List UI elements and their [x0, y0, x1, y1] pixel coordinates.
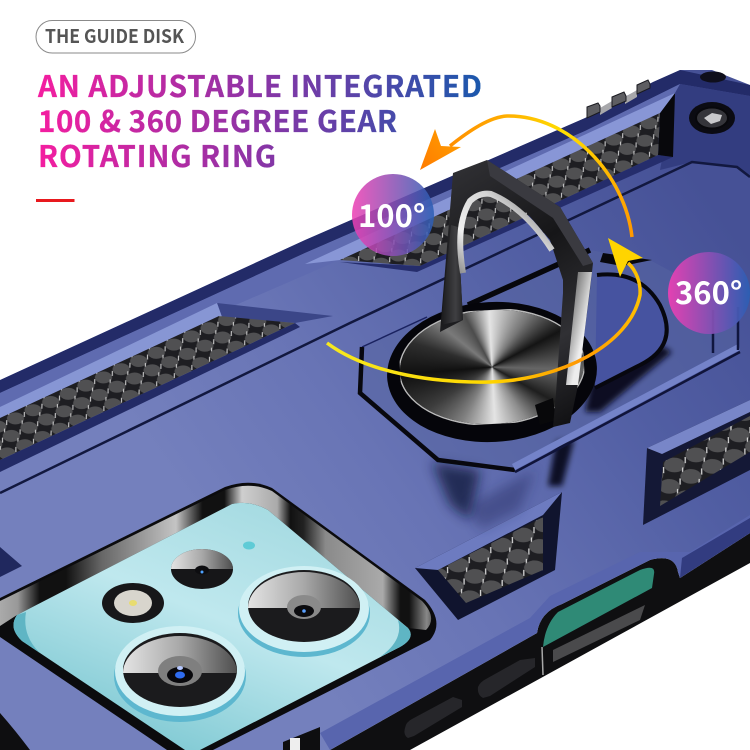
left texture: [0, 316, 295, 460]
bottom port piece: [283, 727, 320, 750]
top right panel: [660, 84, 750, 177]
key two: [612, 92, 626, 107]
disc base: [383, 297, 601, 447]
diagonal groove: [0, 162, 750, 493]
key three: [637, 80, 650, 94]
grip strip: left: [0, 303, 333, 472]
left bevel: [0, 303, 222, 418]
ring lower right silver: [566, 272, 592, 385]
arrow head right: [608, 238, 643, 277]
top hole: [700, 72, 726, 82]
small lens: [171, 549, 233, 589]
plate lower lip: [512, 344, 740, 470]
bottom port highlight: [290, 738, 300, 750]
camera glass: [13, 503, 411, 750]
side button upper: [478, 658, 535, 698]
oval shadow: [585, 345, 672, 412]
main lens right: [238, 566, 370, 657]
plate thin top line: [362, 317, 427, 347]
ring disc: [397, 305, 587, 429]
top edge band: [0, 70, 750, 393]
screw socket: [704, 113, 722, 124]
camera island: [0, 483, 436, 750]
plate wedge bar: [600, 253, 652, 266]
main lens bottom: [114, 626, 246, 722]
key connectors: [600, 90, 637, 115]
teal dot: [243, 542, 255, 550]
badge 360 degrees: 360°: [675, 268, 742, 313]
left lower bevel: [0, 323, 300, 472]
badge 100 degrees: 100°: [358, 191, 425, 236]
ring inner silver edge: [460, 194, 552, 273]
title: 100 & 360 DEGREE GEAR: [38, 99, 397, 141]
gear ring arch: [440, 160, 593, 427]
plate top black bar: [468, 250, 590, 305]
plate ticks: [712, 320, 740, 353]
frame black base: [0, 483, 436, 750]
title: ROTATING RING: [38, 134, 276, 176]
ring mount plate: [360, 250, 740, 472]
bottom black corner left: [0, 713, 30, 750]
upper wedge: [658, 93, 675, 157]
badge 100 degrees: [352, 174, 434, 256]
plate thick left outline: [360, 347, 515, 470]
grip strip: lower centre: [415, 492, 562, 620]
plate fill: [362, 342, 568, 452]
screw ring: [696, 108, 728, 128]
right texture: [660, 416, 750, 506]
grip strip: upper: [305, 93, 675, 272]
lower texture: [438, 517, 543, 603]
right lower navy band: [680, 518, 750, 578]
ring outline: [440, 160, 593, 427]
oval recess: [595, 274, 667, 388]
frame metal band: [0, 486, 431, 630]
title: AN ADJUSTABLE INTEGRATED: [37, 64, 482, 106]
fragment left of camera: [0, 547, 22, 577]
frame seam: [542, 647, 543, 675]
glass corner rim left: [13, 612, 40, 653]
red accent line: [36, 199, 74, 202]
phone side band: [330, 533, 750, 750]
screw: [689, 102, 735, 134]
upper lower bevel: [340, 155, 673, 272]
lower edge band: [320, 515, 750, 750]
title: [37, 64, 482, 176]
grip strip: right: [643, 400, 750, 525]
rotation arrow 100 degree: [420, 116, 632, 237]
key one: [587, 103, 600, 118]
arrow head left: [420, 129, 461, 170]
top side keys: [587, 80, 650, 118]
right bevel: [647, 400, 750, 454]
badge 360 degrees: [668, 252, 750, 334]
side button lower: [404, 697, 462, 738]
lower bevel: [415, 492, 562, 570]
left wedge: [217, 303, 333, 323]
glass corner rim right: [380, 620, 411, 657]
rotation arrow 360 degree: [327, 238, 643, 382]
tag: the guide disk: THE GUIDE DISK: [45, 22, 185, 49]
band under top edge: [0, 84, 680, 407]
upper texture: [340, 113, 660, 266]
upper bevel: [305, 93, 675, 264]
ring top facet: [487, 160, 593, 266]
left arm shading: [441, 225, 463, 325]
green switch: [543, 568, 654, 647]
ring shadow: [432, 462, 480, 520]
port slot: [553, 605, 645, 662]
ring notch: [535, 398, 556, 425]
plate under lip: [515, 352, 740, 472]
flash: [102, 583, 164, 623]
